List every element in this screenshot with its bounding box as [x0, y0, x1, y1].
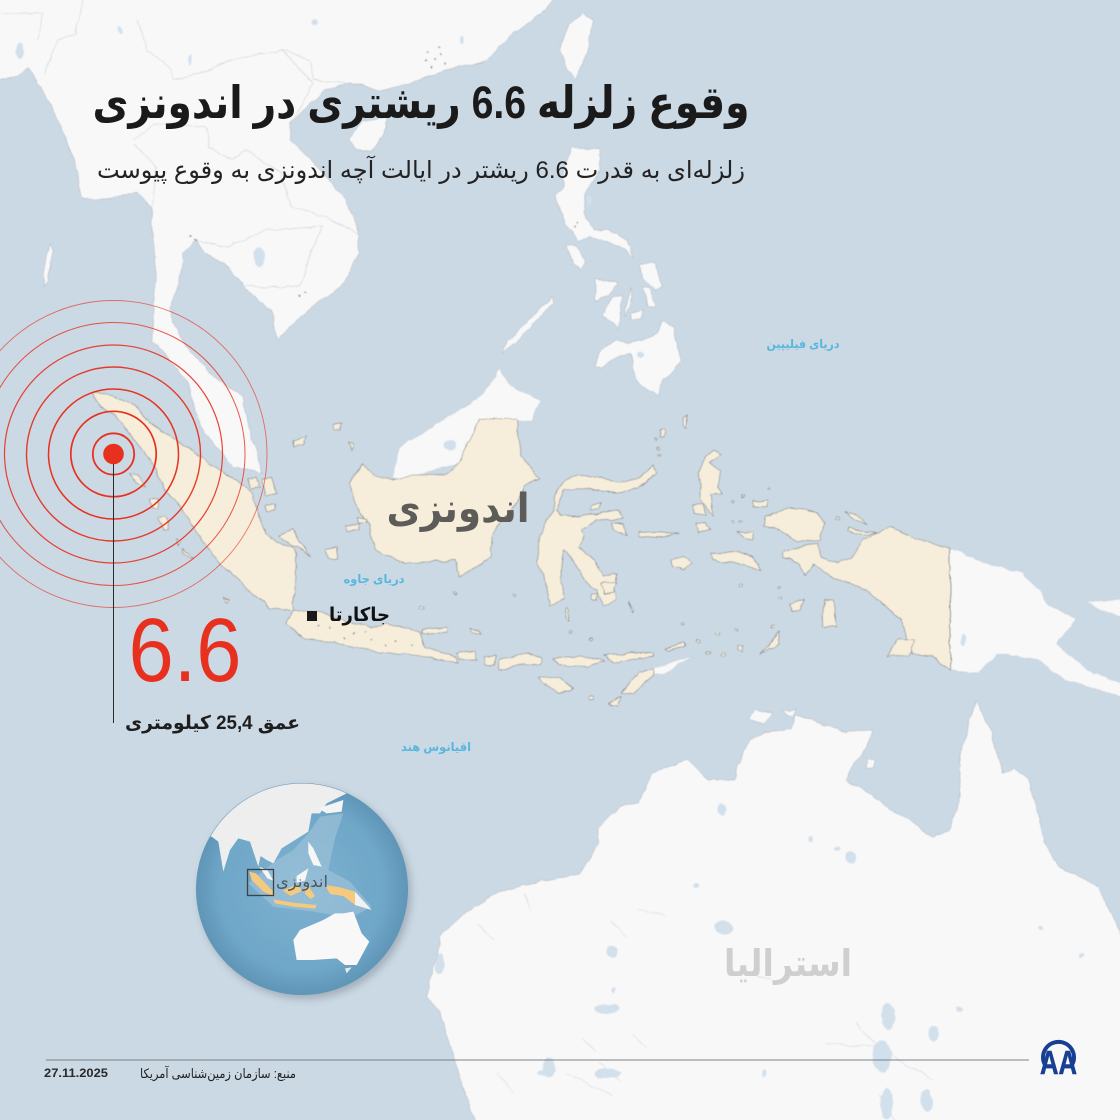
land: Papua border line [949, 548, 951, 670]
land: Philippines [555, 147, 680, 395]
land: mainland Asia [0, 0, 553, 473]
globe: Asia [210, 784, 346, 872]
footer rule [46, 1059, 1029, 1061]
depth label: عمق 25,4 کیلومتری [125, 713, 300, 734]
globe: label: اندونزی [276, 874, 328, 892]
globe: Japan [322, 800, 344, 814]
land: Papua New Guinea [950, 548, 1120, 702]
land: Indonesia east islands [345, 415, 950, 705]
land: Indonesia Java [287, 610, 458, 663]
globe: Philippines [308, 842, 322, 867]
icon: AA logo: AA [1040, 1044, 1077, 1081]
magnitude value: 6.6 [128, 601, 242, 701]
land: East Timor [653, 657, 693, 675]
land: North Borneo [392, 368, 541, 478]
land: Indonesia Sumatra group [93, 393, 342, 610]
epicenter rings [0, 300, 267, 608]
globe: Tasmania [345, 967, 352, 973]
land: Australia [427, 702, 1120, 1120]
map: rivers [478, 893, 933, 1120]
locator globe [196, 767, 411, 999]
land: Andaman islands [44, 245, 53, 288]
map: country borders [0, 0, 357, 287]
footer source: منبع: سازمان زمین‌شناسی آمریکا [140, 1065, 296, 1082]
label: Australia: استرالیا [724, 943, 852, 985]
globe: New Guinea east [355, 892, 372, 910]
globe: shallow seas [248, 813, 372, 918]
land: Palawan [503, 297, 553, 355]
land: Taiwan [560, 13, 594, 78]
label: Indonesia: اندونزی [386, 487, 530, 532]
globe: Indonesia [249, 872, 355, 909]
map: populated-area specks [190, 47, 579, 646]
globe: Australia [293, 912, 369, 965]
epicenter dot [103, 444, 124, 464]
label: Java Sea: دریای جاوه [344, 572, 404, 587]
leader line [112, 454, 114, 723]
label: Philippine Sea: دریای فیلیپین [766, 337, 840, 351]
city label: Jakarta: جاکارتا [329, 605, 390, 626]
city marker: Jakarta [307, 611, 317, 621]
title: وقوع زلزله 6.6 ریشتری در اندونزی [92, 77, 750, 129]
map: lakes [436, 804, 1083, 1118]
label: Indian Ocean: اقیانوس هند [401, 740, 471, 755]
globe: Malay and Borneo north [259, 867, 308, 883]
map: Asian lakes [17, 19, 966, 646]
land: Hainan [348, 117, 388, 150]
footer date: 27.11.2025 [44, 1066, 108, 1080]
subtitle: زلزله‌ای به قدرت 6.6 ریشتر در ایالت آچه اندونزی به وقوع پیوست [97, 155, 745, 184]
globe: locator box [248, 870, 274, 896]
land: New Britain [1086, 598, 1120, 618]
